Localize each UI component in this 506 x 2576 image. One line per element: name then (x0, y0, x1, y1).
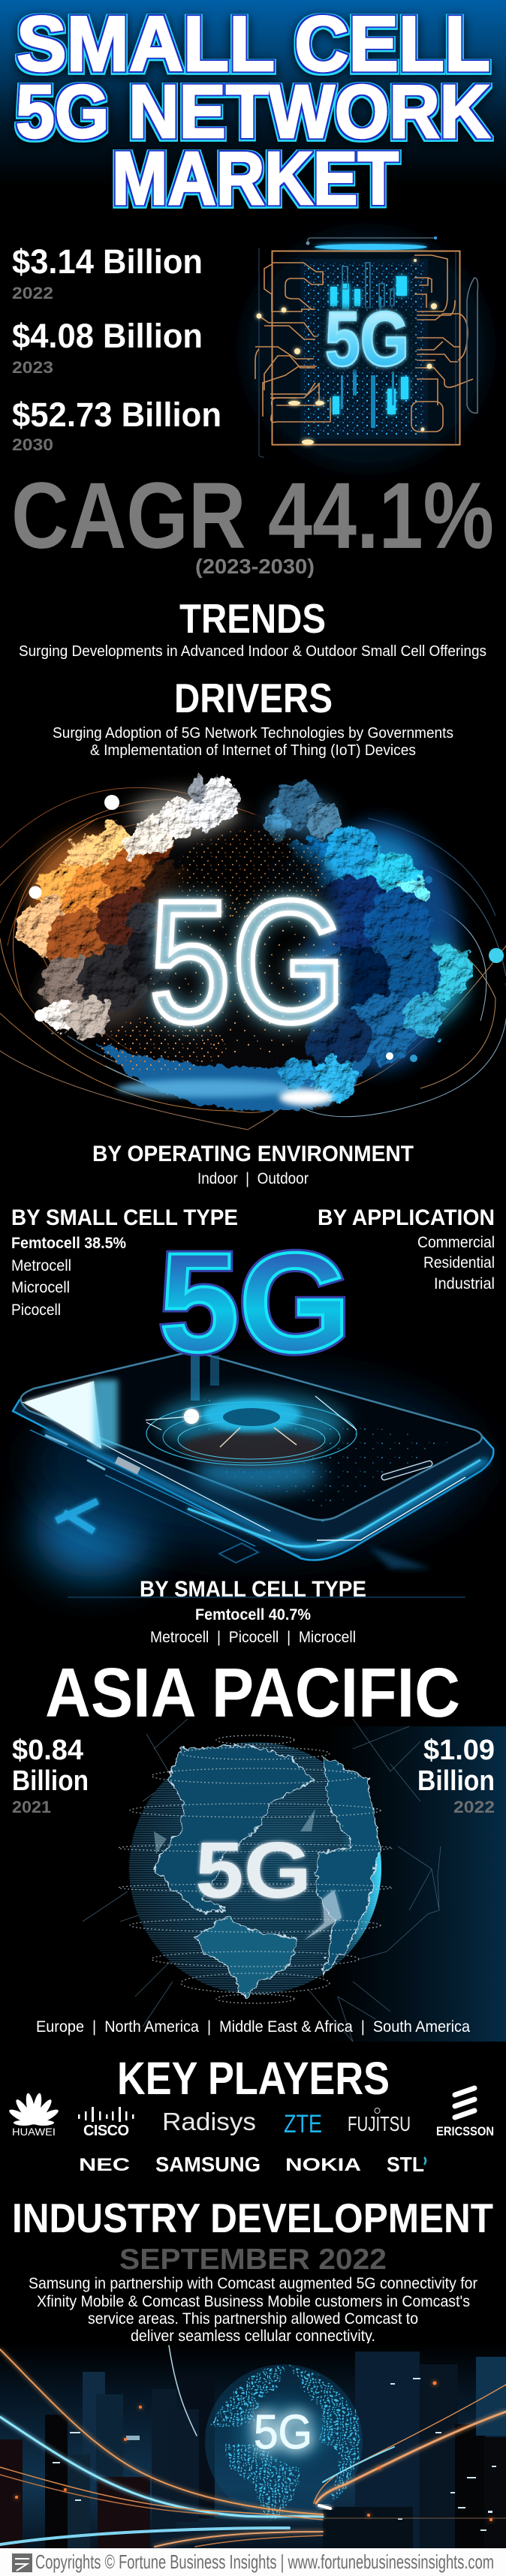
value 2021 (12, 1735, 89, 1816)
development text: Xfinity Mobile & Comcast Business Mobile customers in Comcast's (37, 2293, 470, 2310)
stat 2023: $4.08 Billion (12, 317, 203, 355)
copper traces (255, 255, 477, 432)
development text: deliver seamless cellular connectivity. (131, 2328, 375, 2345)
panel: header (0, 0, 506, 221)
panel: by small cell type list (11, 1205, 238, 1319)
small cell values: Femtocell 38.5% (11, 1235, 126, 1252)
drivers text (53, 725, 453, 759)
orange lights (15, 2381, 492, 2521)
clouds: orange left (65, 838, 116, 889)
panel: by operating environment (92, 1142, 414, 1187)
buildings (0, 2352, 506, 2548)
logo: Nokia: NOKIA (285, 2155, 361, 2175)
panel: trends (19, 595, 486, 660)
value 2022: Billion (417, 1765, 495, 1797)
asia pacific heading: ASIA PACIFIC (45, 1654, 460, 1732)
logo: Ericsson: ERICSSON (436, 2124, 494, 2138)
development text (29, 2275, 477, 2345)
panel: industry development (12, 2195, 493, 2345)
logo: Radisys: Radisys (162, 2108, 256, 2135)
cloud 5G label: 5G (149, 865, 347, 1059)
clouds (19, 778, 471, 1100)
panel: market size stats (12, 242, 221, 454)
value 2021: Billion (12, 1765, 89, 1797)
logo: Samsung: SAMSUNG (155, 2153, 261, 2176)
stat 2030: 2030 (12, 435, 53, 454)
application values: Commercial (417, 1234, 495, 1251)
trace hot spots (257, 259, 437, 444)
drivers text: & Implementation of Internet of Thing (IoT) Devices (90, 742, 416, 759)
value 2022: 2022 (453, 1798, 495, 1816)
big 5G label: 5G (159, 1223, 351, 1381)
other regions: Europe | North America | Middle East & Africa | South America (36, 2018, 470, 2036)
logo: Cisco: CISCO (83, 2123, 129, 2139)
logo: Fujitsu (348, 2108, 411, 2135)
dotted rings (119, 1735, 392, 2003)
stat 2022: 2022 (12, 284, 53, 302)
clouds: blue right (258, 858, 321, 921)
development date: SEPTEMBER 2022 (119, 2243, 387, 2276)
stat 2023 (12, 317, 203, 377)
globe 5G label: 5G (195, 1826, 312, 1915)
logo: Huawei (8, 2093, 60, 2138)
network triangles (304, 1890, 342, 1940)
other types: Metrocell | Picocell | Microcell (150, 1629, 356, 1646)
clouds: cream top (134, 814, 173, 853)
value 2022 (417, 1735, 495, 1816)
logo: Ericsson (436, 2088, 494, 2138)
logo: ZTE: ZTE (284, 2110, 322, 2138)
stat 2030 (12, 396, 221, 454)
femtocell share: Femtocell 40.7% (195, 1606, 311, 1624)
side button (116, 1460, 139, 1471)
CAGR period: (2023-2030) (195, 555, 315, 578)
panel: by small cell type share (140, 1577, 366, 1646)
core specks (150, 897, 345, 1055)
illustration: 5G cloud sphere (0, 778, 506, 1130)
home button (384, 1464, 429, 1477)
logo: Huawei: HUAWEI (12, 2126, 56, 2138)
value 2022: $1.09 (423, 1735, 495, 1766)
drivers text: Surging Adoption of 5G Network Technologies by Governments (53, 725, 453, 742)
panel: drivers (53, 675, 453, 759)
white and cyan nodes (29, 795, 504, 1062)
key players heading: KEY PLAYERS (117, 2053, 390, 2104)
phone body (13, 1400, 493, 1560)
chip 5G label (319, 308, 415, 371)
small cell heading: BY SMALL CELL TYPE (11, 1205, 238, 1230)
big 5G label: 5G (159, 1223, 351, 1381)
stat 2022: $3.14 Billion (12, 242, 203, 281)
share heading: BY SMALL CELL TYPE (140, 1577, 366, 1602)
globe (119, 1735, 392, 2003)
phone screen (21, 1353, 482, 1520)
stat 2030: $52.73 Billion (12, 396, 221, 434)
clouds: blue top (273, 783, 321, 831)
header gradient (0, 0, 506, 188)
lower left specks (98, 1016, 225, 1073)
cyan light bars (330, 276, 408, 414)
application values: Industrial (434, 1275, 495, 1293)
panel: by application (318, 1205, 495, 1293)
logo: Fujitsu: FUJITSU (348, 2112, 411, 2135)
drivers heading: DRIVERS (174, 675, 333, 721)
cloud 5G label: 5G (149, 865, 347, 1059)
footer logo (12, 2553, 32, 2572)
value 2021: $0.84 (12, 1735, 83, 1766)
small cell values (11, 1235, 126, 1319)
city 5G label: 5G (254, 2405, 312, 2459)
trends text: Surging Developments in Advanced Indoor & Outdoor Small Cell Offerings (19, 643, 486, 660)
building windows (53, 2378, 496, 2531)
application values (417, 1234, 495, 1293)
network background (83, 1719, 506, 2042)
screen highlight (24, 1381, 101, 1449)
logo: NEC: NEC (79, 2155, 130, 2175)
orbit arcs (0, 787, 506, 1130)
dotted 5G globe (205, 2364, 363, 2522)
logo: Cisco (78, 2107, 134, 2139)
dome specks (176, 829, 327, 919)
title: MARKET (112, 137, 399, 221)
illustration: 5G circuit chip: 5G (325, 296, 409, 382)
dark sphere (64, 814, 439, 1107)
hologram (146, 1392, 357, 1492)
phone ambient glow (34, 1485, 154, 1578)
small cell values: Microcell (11, 1279, 70, 1296)
small cell values: Picocell (11, 1302, 61, 1319)
blue earth glow at base (98, 1043, 375, 1111)
stat 2023: 2023 (12, 358, 53, 377)
illustration: futuristic city (0, 2343, 506, 2548)
dark dome (158, 820, 345, 982)
cloud colour underlay (30, 793, 465, 1070)
footer (0, 2548, 506, 2576)
development text: service areas. This partnership allowed Comcast to (88, 2310, 418, 2328)
illustration: 5G circuit chip (242, 229, 490, 469)
operating environment heading: BY OPERATING ENVIRONMENT (92, 1142, 414, 1166)
light trails (0, 2346, 506, 2547)
application heading: BY APPLICATION (318, 1205, 495, 1230)
chip frame (272, 251, 459, 444)
clouds: grey lower left (41, 956, 95, 1010)
operating environment values: Indoor | Outdoor (197, 1170, 309, 1187)
panel: key players (8, 2053, 494, 2176)
logo: STL: STL (387, 2153, 424, 2176)
stat 2022 (12, 242, 203, 302)
illustration: smartphone (13, 1353, 493, 1597)
continents (154, 1744, 379, 1997)
small cell values: Metrocell (11, 1257, 71, 1274)
value 2021: 2021 (12, 1798, 51, 1816)
chip top glow (315, 244, 427, 250)
title: SMALL CELL (17, 1, 490, 88)
title (16, 1, 490, 221)
application values: Residential (423, 1254, 495, 1271)
trends heading: TRENDS (179, 595, 326, 642)
chip bottom glow (281, 456, 471, 457)
panel: asia pacific (12, 1654, 506, 2042)
development text: Samsung in partnership with Comcast augmented 5G connectivity for (29, 2275, 477, 2292)
